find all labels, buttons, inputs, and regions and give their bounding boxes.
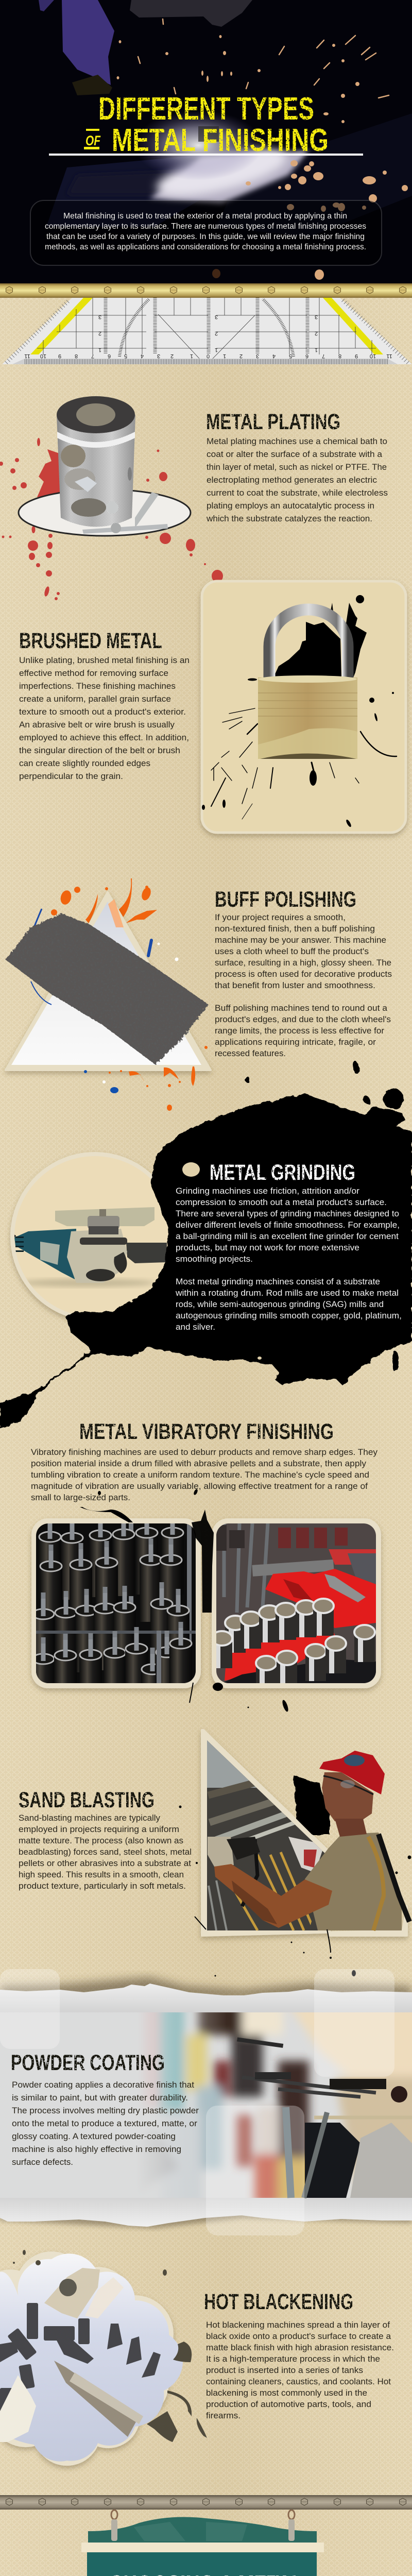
photo card: socket sets, red tray [212,1518,381,1693]
intro panel: methods, as well as applications and considerations for choosing a metal finishing process. [45,243,366,251]
text: vibratory finishing: position material inside a drum filled with abrasive pellets and a substrate, then apply [31,1459,367,1468]
text: buff polishing: non-textured finish, then a buff polishing [215,924,375,934]
text: hot blackening: production of automotive parts, tools, and [206,2400,371,2409]
text: brushed metal: imperfections. These finishing machines [19,682,176,691]
text: powder coating: surface defects. [12,2158,73,2167]
text: hot blackening [206,2320,394,2420]
text: metal plating: thin layer of metal, such as nickel or PTFE. The [207,463,387,472]
text: metal grinding: within a rotating drum. Rod mills are used to make metal [175,1289,399,1298]
ruler image: set square: 3 [315,314,318,320]
title: METAL FINISHING [112,123,329,158]
heading: hot blackening: HOT BLACKENING [204,2290,353,2314]
heading: metal plating: METAL PLATING [206,410,340,434]
image: angle grinder in circle [0,1152,179,1321]
intro panel: complementary layer to its surface. There are numerous types of metal finishing processes [45,222,366,231]
text: metal grinding: Most metal grinding machines consist of a substrate [176,1277,380,1286]
ruler image: set square: 1 [315,347,318,353]
heading: brushed metal: BRUSHED METAL [19,629,162,653]
text: metal grinding: compression to smooth out a metal product's surface. [176,1198,387,1207]
ruler image: set square: 0 [207,353,210,359]
text: buff polishing: uses a cloth wheel to buff the product's [215,947,369,956]
text: metal plating: coat or alter the surface of a substrate with a [207,450,383,459]
ruler image: set square: 11 [386,353,392,359]
text: hot blackening: blackening is most commonly used in the [206,2388,367,2398]
text: buff polishing: applications requiring intricate, fragile, or [215,1038,376,1047]
ruler image: set square: 1 [215,347,218,353]
text: hot blackening: product is inserted into a series of tanks [206,2366,363,2375]
text: metal plating: Metal plating machines use a chemical bath to [207,437,387,446]
text: vibratory finishing: tumbling vibration to create a uniform random texture. The machine's cycle speed and [31,1470,369,1480]
text: metal grinding: and silver. [176,1323,215,1332]
text: buff polishing: surface, resulting in a high, glossy sheen. The [215,958,391,968]
text: hot blackening: It is a high-temperature process in which the [206,2354,380,2364]
text: metal grinding: autogenous grinding mills smooth copper, gold, platinum, [176,1311,402,1320]
text: hot blackening: Hot blackening machines spread a thin layer of [206,2320,390,2330]
ruler image: set square: 5 [124,353,127,359]
gold riveted bar [0,283,412,298]
ruler image: set square: 5 [289,353,292,359]
ruler image: set square: 7 [91,353,94,359]
text: powder coating: onto the metal to produce a textured, matte, or [12,2119,198,2128]
text: brushed metal: can create slightly rounded edges [19,759,150,768]
ruler image: set square: 2 [315,330,318,336]
text: buff polishing: recessed features. [215,1049,286,1058]
photo card: socket sets, black [29,1518,203,1694]
text: metal plating: plating employs an autocatalytic process in [207,501,374,511]
ink splatter between photos [80,1488,289,1713]
ruler image: set square: 7 [322,353,325,359]
ruler image: set square: 8 [75,353,78,359]
ruler image: set square: 4 [272,353,276,359]
text: buff polishing: range limits, the process is less effective for [215,1026,385,1036]
ruler image: set square: 1 [98,347,101,353]
text: metal plating: current to coat the substrate, while electroless [207,488,388,498]
translucent panels over band [0,1969,394,2235]
text: buff polishing: that benefit from luster and smoothness. [215,981,375,990]
image: buff pad on triangle with paint splashes [6,878,211,1111]
sign: choosing a process [81,2510,324,2576]
text: buff polishing: machine may be your answer. This machine [215,936,386,945]
text: brushed metal: perpendicular to the grain. [19,772,123,781]
text: metal grinding: products, but may not work for more extensive [176,1243,359,1252]
text: metal grinding: rods, while semi-autogenous grinding (SAG) mills and [176,1300,384,1309]
ruler image: set square: 3 [98,314,101,320]
ruler image: set square: 10 [370,353,376,359]
text: buff polishing: If your project requires a smooth, [215,913,346,922]
heading: powder coating: POWDER COATING [11,2050,165,2075]
text: sand blasting: high speed. This results in a smooth, clean [19,1870,184,1879]
text: metal grinding: smoothing projects. [176,1255,253,1264]
text: brushed metal: create a uniform, parallel grain surface [19,694,171,704]
title [49,91,363,158]
heading: metal vibratory finishing: METAL VIBRATORY FINISHING [79,1419,334,1444]
ruler image: set square: 2 [215,330,218,336]
text: buff polishing: product's edges, and due to the cloth wheel's [215,1015,391,1024]
intro panel: Metal finishing is used to treat the exterior of a metal product by applying a thin [63,212,347,221]
text: sand blasting: beadblasting) forces sand, steel shots, metal [19,1848,192,1857]
text: brushed metal: texture to smooth out a product's exterior. [19,707,186,717]
heading: metal grinding: METAL GRINDING [210,1160,355,1185]
text: sand blasting: Sand-blasting machines are typically [19,1814,161,1823]
panel: torn paper band with airbrush photo [0,1977,412,2228]
text: buff polishing: Buff polishing machines tend to round out a [215,1004,388,1013]
text: vibratory finishing: magnitude of vibration are usually variable, allowing effective treatment for a range of [31,1482,368,1491]
ruler image: set square: 2 [239,353,243,359]
text: sand blasting: pellets or other abrasives into a substrate at [19,1859,191,1868]
text: powder coating: machine is also highly effective in removing [12,2145,181,2154]
text: metal grinding: deliver different levels of finite smoothness. For example, [176,1221,400,1230]
ruler image: set square: 6 [108,353,111,359]
text: buff polishing: process is often used for decorative products [215,970,392,979]
ink blob holes [182,1162,262,1360]
ruler image: set square [2,298,412,364]
intro panel [30,200,382,265]
red paint splatter [0,438,223,600]
title: DIFFERENT TYPES [98,91,314,127]
ruler image: set square: 9 [58,353,61,359]
panel: ink blob [0,1062,412,1429]
image: tools in scalloped cloud [0,2250,207,2466]
text: buff polishing [215,913,392,1058]
text: hot blackening: black oxide onto a product's surface to create a [206,2332,391,2341]
text: metal grinding [175,1187,402,1332]
ruler image: set square: 11 [24,353,30,359]
text: vibratory finishing [31,1448,378,1502]
text: sand blasting [19,1814,192,1891]
text: sand blasting: matte texture. The process (also known as [19,1836,183,1845]
text: sand blasting: product texture, particularly in soft metals. [19,1882,186,1891]
text: brushed metal: effective method for removing surface [19,669,168,678]
title: OF [85,133,101,148]
ruler image: set square: 10 [40,353,46,359]
ruler image: set square: 9 [355,353,358,359]
panel: padlock image card [202,581,406,833]
hero: welding photo [0,0,412,283]
text: vibratory finishing: small to large-sized parts. [31,1493,130,1502]
intro panel: that can be used for a variety of purposes. In this guide, we will review the major finishing [46,232,365,241]
text: brushed metal: employed to achieve this effect. In addition, [19,733,189,742]
text: vibratory finishing: Vibratory finishing machines are used to deburr products and remove sharp edges. They [31,1448,378,1457]
ruler image: set square: 2 [98,330,101,336]
text: metal plating: which the substrate catalyzes the reaction. [206,514,372,523]
text: brushed metal [19,656,190,781]
ruler image: set square: 3 [215,314,218,320]
ruler image: set square: 8 [338,353,341,359]
text: metal plating [206,437,388,523]
ruler image: set square: 3 [157,353,160,359]
text: powder coating: glossy coating. A textured powder-coating [12,2132,176,2141]
text: metal grinding: There are several types of grinding machines designed to [176,1209,399,1218]
text: powder coating [12,2080,199,2167]
ruler image: set square: 4 [141,353,144,359]
ruler image: set square: 3 [256,353,259,359]
text: metal grinding: a ball-grinding mill is an excellent fine grinder for cement [176,1232,399,1241]
image: sand blasting worker card [179,1730,411,1976]
text: brushed metal: the singular direction of the belt or brush [19,746,180,755]
text: hot blackening: firearms. [206,2411,241,2420]
text: brushed metal: An abrasive belt or wire brush is usually [19,720,175,730]
text: powder coating: The process involves melting dry plastic powder [12,2106,199,2115]
text: metal grinding: Grinding machines use friction, attrition and/or [176,1187,360,1196]
image: knurled metal cylinder on white plate [19,396,191,536]
text: hot blackening: matte black finish with high abrasion resistance. [206,2343,394,2352]
text: sand blasting: employed in projects requiring a uniform [19,1825,179,1834]
ruler image: set square: 6 [305,353,308,359]
text: powder coating: is similar to paint, but with greater durability. [12,2093,188,2103]
heading: sand blasting: SAND BLASTING [19,1788,154,1812]
heading: buff polishing: BUFF POLISHING [215,887,356,912]
text: powder coating: Powder coating applies a decorative finish that [12,2080,194,2090]
ruler image: set square: 2 [170,353,174,359]
text: brushed metal: Unlike plating, brushed metal finishing is an [19,656,190,665]
ruler image: set square: 1 [190,353,193,359]
text: metal plating: electroplating method generates an electric [207,476,377,485]
text: hot blackening: containing cleaners, caustics, and coolants. Hot [206,2377,391,2386]
ruler image: set square: 1 [223,353,226,359]
taupe riveted bar [0,2495,412,2510]
